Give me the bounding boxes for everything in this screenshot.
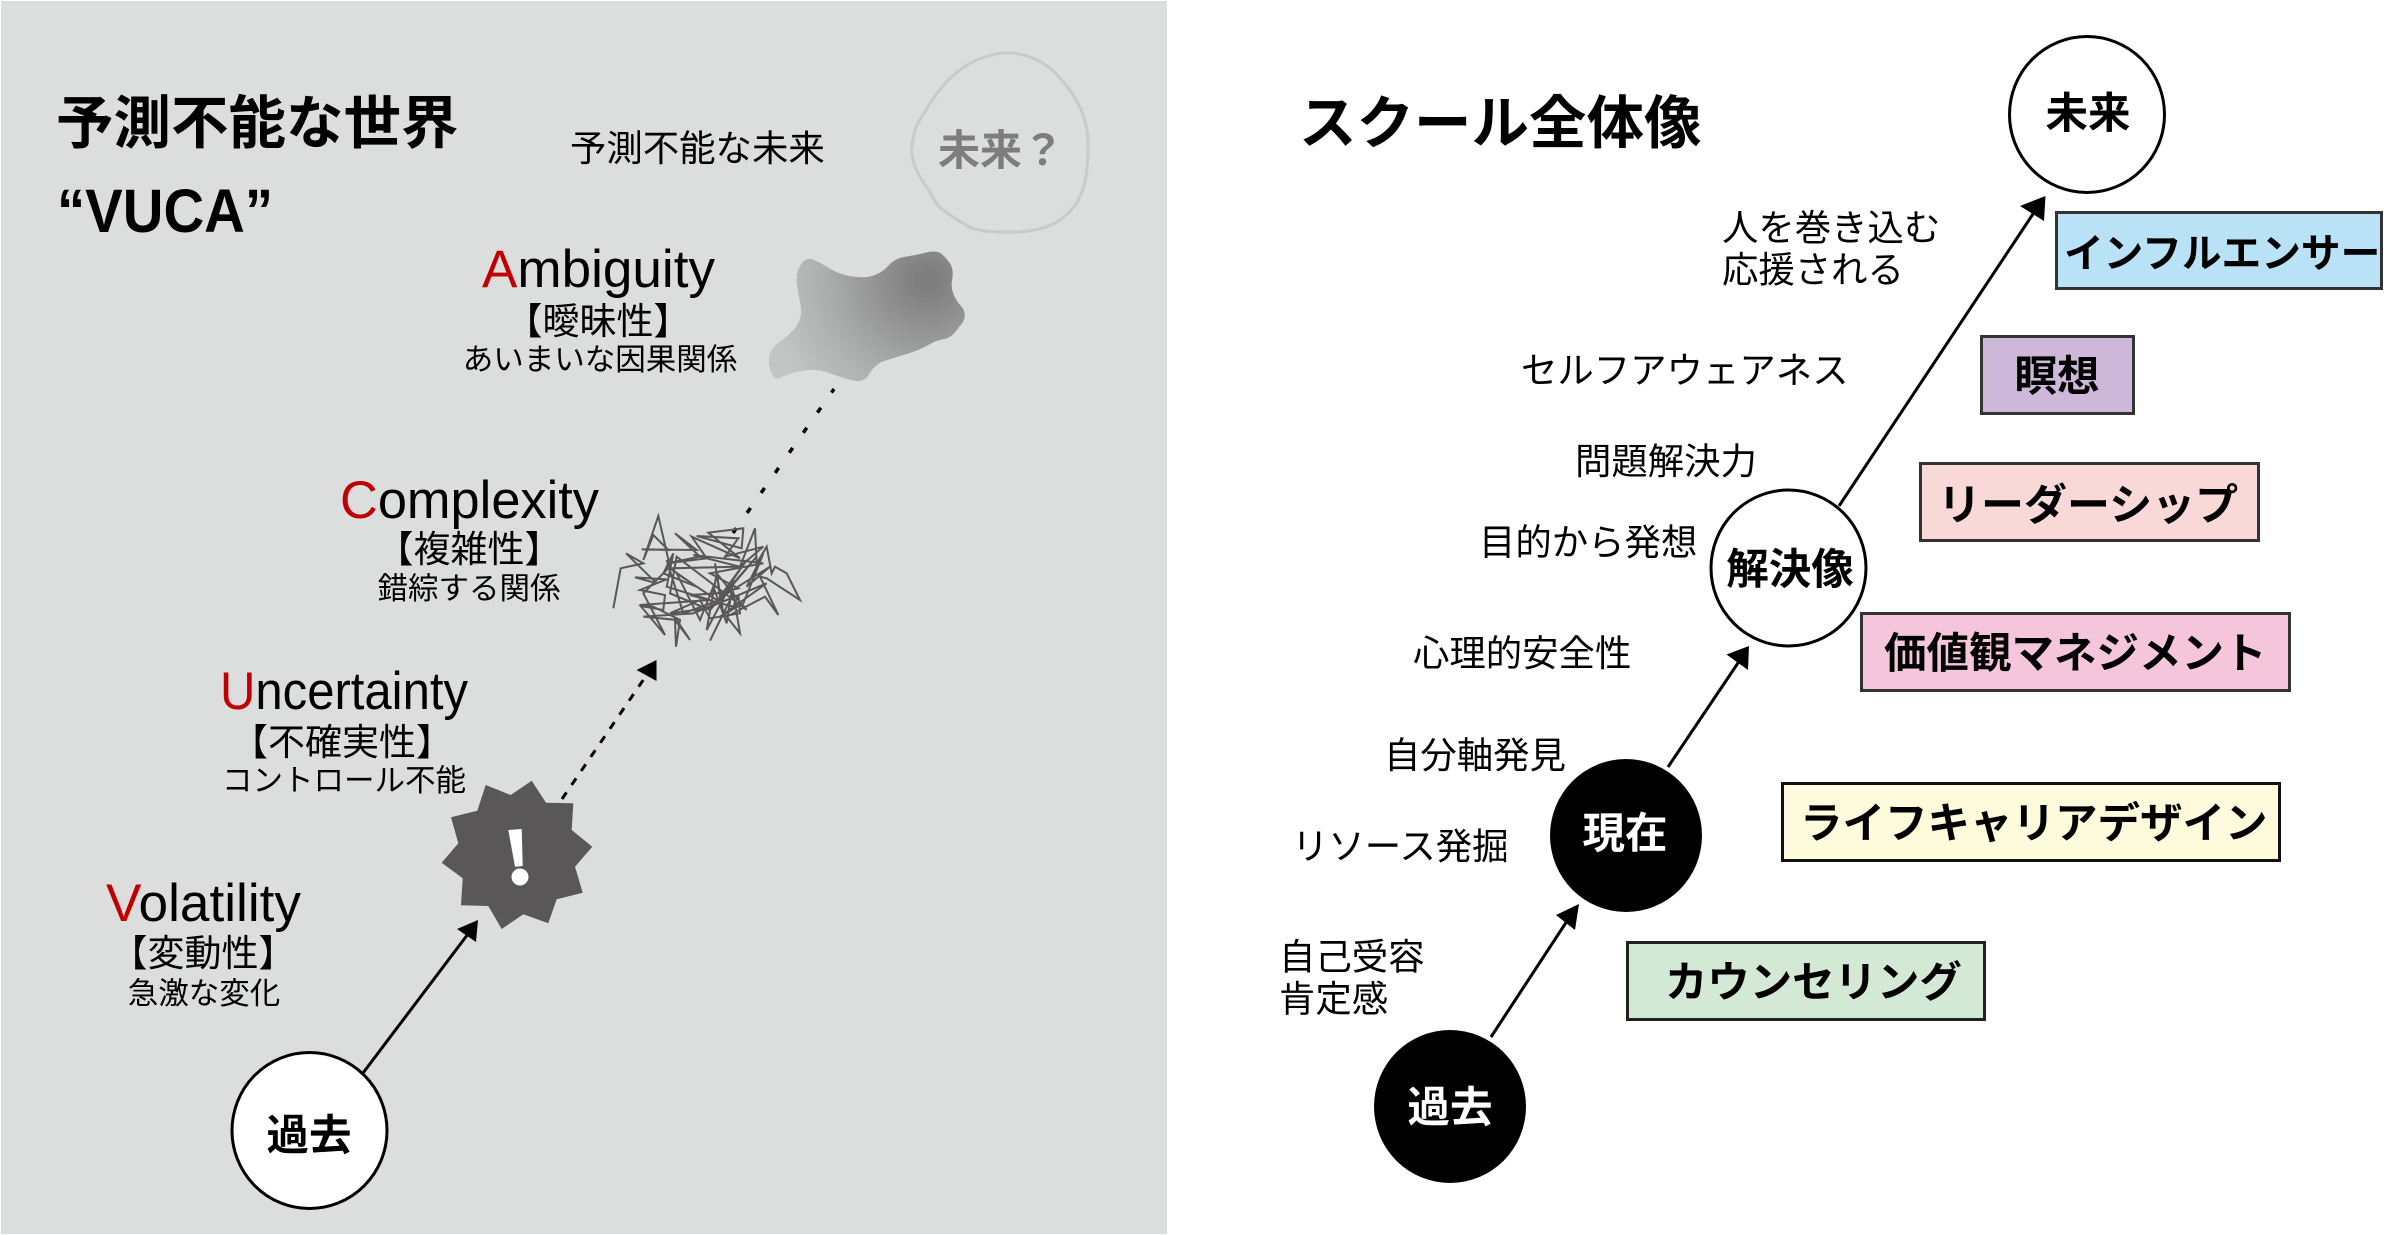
label: discover own axis: 自分軸発見 [1384,735,1566,776]
block: Ambiguity: あいまいな因果関係 [463,343,737,377]
label: self awareness: セルフアウェアネス [1521,350,1849,391]
box: life career design: ライフキャリアデザイン [1800,800,2268,848]
node: past [1374,1030,1526,1183]
box: leadership [1920,464,2258,540]
box: influencer: インフルエンサー [2064,232,2380,276]
label: involve people: 人を巻き込む [1722,208,1940,248]
label: self acceptance: 自己受容 [1279,936,1425,978]
icon: tangled scribble [613,516,800,647]
block: Volatility: 急激な変化 [128,977,280,1011]
icon: ambiguous blob [769,251,965,381]
arrow: present to solution [1668,646,1749,767]
node: solution image [1711,490,1866,646]
panel: VUCA world [1,1,1167,1234]
label: unpredictable future: 予測不能な未来 [570,128,825,169]
arrow: past to present [1491,904,1579,1037]
box: meditation: 瞑想 [2014,354,2100,401]
block: Uncertainty [220,662,468,798]
block: Volatility [106,874,301,1011]
arrow: dotted link complexity to ambiguity [733,389,834,533]
node: present [1550,759,1702,912]
block: Uncertainty: コントロール不能 [222,764,466,798]
arrow: dotted link volatility to complexity [562,660,656,799]
label: problem solving: 問題解決力 [1575,441,1757,482]
label: self affirmation: 肯定感 [1279,978,1388,1020]
block: Complexity: 錯綜する関係 [378,572,560,606]
block: Ambiguity [463,240,737,377]
block: Complexity: Complexity [340,471,599,530]
heading: school overview: スクール全体像 [1299,92,1702,156]
arrow: solution to future [1839,196,2046,506]
label: be supported: 応援される [1722,250,1904,290]
node: future [2010,36,2164,192]
node: present: 現在 [1582,811,1668,858]
box: counseling [1628,942,1984,1020]
label: think from purpose: 目的から発想 [1479,522,1697,563]
heading: VUCA: “VUCA” [57,177,273,245]
node: solution image: 解決像 [1726,547,1854,594]
block: Ambiguity: 【曖昧性】 [506,301,690,342]
label: psychological safety: 心理的安全性 [1413,633,1631,674]
box: leadership: リーダーシップ [1938,482,2238,530]
node: future: 未来 [2045,91,2131,138]
box: life career design [1782,784,2280,860]
node: past [232,1052,387,1208]
box: influencer [2056,212,2382,288]
block: Complexity: 【複雑性】 [376,529,562,570]
panel: school overview [1279,36,2382,1183]
block: Volatility: 【変動性】 [110,933,296,974]
box: values management: 価値観マネジメント [1884,631,2267,678]
icon: alert starburst [442,781,592,929]
node: past: 過去 [266,1113,352,1160]
box: values management [1862,614,2290,690]
block: Uncertainty: Uncertainty [220,662,468,721]
node: past: 過去 [1407,1085,1493,1132]
block: Ambiguity: Ambiguity [482,240,715,299]
node: uncertain future [912,53,1088,232]
block: Volatility: Volatility [106,874,301,933]
heading: unpredictable world: 予測不能な世界 [56,92,458,156]
block: Uncertainty: 【不確実性】 [231,722,453,763]
node: uncertain future: 未来？ [938,127,1064,174]
label: resource discovery: リソース発掘 [1292,826,1509,867]
block: Complexity [340,471,599,606]
arrow: past to volatility [363,920,478,1073]
box: counseling: カウンセリング [1665,959,1962,1006]
box: meditation [1982,336,2134,414]
